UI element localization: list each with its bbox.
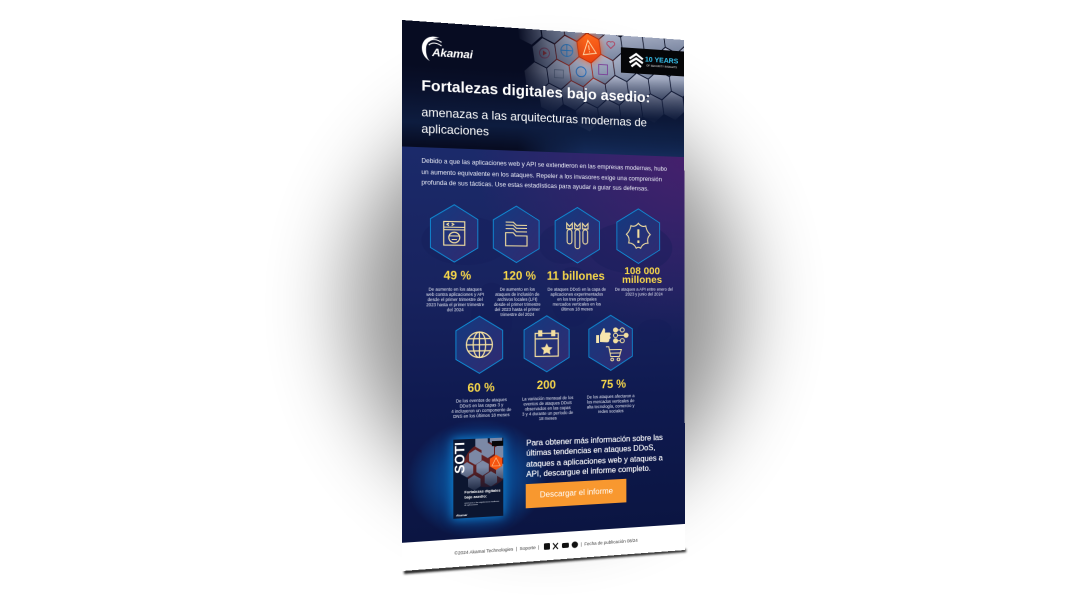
stat description 3: De ataques DDoS en la capa de bbox=[548, 286, 606, 291]
intro text bbox=[421, 158, 667, 193]
stat: 60 %: 60 % bbox=[467, 382, 495, 395]
icon: globe bbox=[456, 316, 503, 374]
panel: footer bbox=[402, 524, 685, 571]
download button bbox=[526, 479, 626, 508]
icon: alert badge bbox=[617, 208, 660, 264]
panel: header with hexagons bbox=[402, 20, 684, 157]
footer copyright: ©2024 Akamai Technologies | Soporte | bbox=[454, 545, 539, 556]
badge title: 10 YEARS bbox=[645, 55, 678, 66]
icon: calendar with star bbox=[524, 316, 569, 372]
stat description 5: DNS en los últimos 18 meses bbox=[453, 412, 510, 419]
cover subtitle: de aplicaciones bbox=[464, 504, 478, 507]
call to action text: Para obtener más información sobre las bbox=[526, 433, 663, 448]
stat description 5: De los eventos de ataques bbox=[456, 396, 507, 403]
icon: three bombs bbox=[555, 207, 599, 263]
cover title: Fortalezas digitales bbox=[464, 488, 501, 494]
stat description 2: del 2023 hasta el primer bbox=[495, 306, 540, 312]
stat description 4 bbox=[615, 286, 673, 297]
stat description 3: en los tres principales bbox=[557, 296, 597, 301]
stat: 200: 200 bbox=[537, 380, 556, 392]
stat description 1: 2023 hasta el primer trimestre bbox=[426, 301, 484, 307]
logo: Akamai bbox=[422, 36, 474, 62]
stat description 1: web contra aplicaciones y API bbox=[426, 291, 484, 296]
intro text: Debido a que las aplicaciones web y API se extendieron en las empresas modernas, hubo bbox=[421, 158, 667, 173]
icon: browser window with malicious face bbox=[430, 204, 478, 262]
intro text: profunda de sus tácticas. Use estas estadísticas para ayudar a guiar sus defensas. bbox=[421, 179, 649, 193]
cover subtitle: amenazas a las arquitecturas modernas bbox=[464, 501, 499, 505]
world map texture bbox=[602, 224, 672, 262]
stat description 7: De los ataques afectaron a bbox=[587, 393, 635, 399]
social icons bbox=[544, 541, 578, 550]
stat description 2: desde el primer trimestre bbox=[494, 301, 541, 307]
stat: 49 %: 49 % bbox=[444, 270, 471, 282]
stat description 3 bbox=[548, 286, 606, 311]
cover hexagons bbox=[460, 438, 504, 490]
stat description 2: De aumento en los bbox=[500, 286, 535, 291]
stat description 6: 18 meses bbox=[539, 415, 557, 421]
icon: thumb, nodes and shopping cart bbox=[589, 315, 632, 371]
subtitle: aplicaciones bbox=[421, 122, 489, 139]
call to action text: ataques a aplicaciones web y ataques a bbox=[526, 453, 663, 469]
book glow bbox=[406, 417, 548, 543]
icon: folders bbox=[493, 206, 539, 263]
stat: 11 billones: 11 billones bbox=[547, 270, 605, 282]
panel: body background bbox=[402, 146, 685, 543]
cover logo: Akamai bbox=[456, 512, 467, 517]
hexagon pattern bbox=[520, 28, 684, 131]
stat description 1: De aumento en los ataques bbox=[429, 286, 482, 291]
stat description 4: 2023 y junio del 2024 bbox=[625, 291, 663, 296]
stat icons: hexagons bbox=[430, 204, 660, 374]
intro text: un aumento equivalente en los ataques. Repeler a los invasores exige una comprensión bbox=[421, 168, 662, 183]
stat description 6 bbox=[522, 395, 574, 421]
stat description 4: De ataques a API entre enero del bbox=[615, 286, 673, 291]
icons on hexagons bbox=[529, 36, 615, 103]
stat: 120 %: 120 % bbox=[503, 270, 536, 282]
icon: orange warning hexagon bbox=[576, 32, 602, 64]
stat description 1: del 2024 bbox=[447, 307, 464, 312]
stat description 5: 4 incluyeron un componente de bbox=[451, 406, 511, 414]
hexagon fade overlay bbox=[402, 20, 684, 157]
stat description 6: 3 y 4 durante un período de bbox=[522, 409, 573, 416]
stat description 6: observados en las capas bbox=[525, 405, 571, 411]
cover subtitle bbox=[464, 500, 500, 507]
stat description 3: últimos 18 meses bbox=[561, 306, 593, 311]
stat description 6: La variación mensual de los bbox=[522, 395, 573, 401]
stat description 2: archivos locales (LFI) bbox=[497, 296, 537, 301]
title: Fortalezas digitales bajo asedio: bbox=[421, 78, 650, 106]
stat description 2: trimestre del 2024 bbox=[500, 311, 534, 317]
subtitle: amenazas a las arquitecturas modernas de bbox=[421, 106, 647, 129]
call to action text: API, descargue el informe completo. bbox=[526, 464, 651, 479]
stat description 2: ataques de inclusión de bbox=[495, 291, 539, 296]
stat description 3: aplicaciones experimentados bbox=[550, 291, 603, 296]
icon: Akamai swoosh bbox=[422, 36, 442, 61]
stat description 1 bbox=[426, 286, 484, 312]
cover title bbox=[464, 488, 501, 500]
report cover bbox=[453, 438, 503, 519]
badge: 10 years of security insights bbox=[621, 47, 684, 76]
download button: Descargar el informe bbox=[540, 486, 613, 499]
stat description 5 bbox=[451, 396, 512, 419]
stat: 75 %: 75 % bbox=[601, 378, 626, 391]
stat description 7: redes sociales bbox=[598, 408, 624, 414]
icon: chevrons bbox=[628, 52, 644, 68]
stat: 108 000 millones: millones bbox=[622, 275, 662, 286]
call to action text: últimas tendencias en ataques DDoS, bbox=[526, 443, 655, 458]
stat description 7: los mercados verticales de bbox=[587, 398, 634, 404]
cover title: bajo asedio: bbox=[464, 494, 487, 499]
badge subtitle: OF SECURITY INSIGHTS bbox=[646, 63, 677, 69]
stat: 108 000 millones: 108 000 bbox=[624, 266, 660, 277]
stat description 6: eventos de ataques DDoS bbox=[523, 400, 572, 406]
stat description 7 bbox=[586, 393, 635, 414]
call to action text bbox=[526, 433, 663, 479]
footer date: | Fecha de publicación 08/24 bbox=[581, 538, 638, 547]
stat description 3: mercados verticales en los bbox=[553, 301, 601, 306]
stat description 5: DDoS en las capas 3 y bbox=[460, 402, 503, 408]
stat description 1: desde el primer trimestre del bbox=[428, 296, 483, 302]
brand name: Akamai bbox=[432, 47, 473, 62]
stat: 108 000 millones bbox=[622, 266, 662, 286]
stat description 7: alta tecnología, comercio y bbox=[587, 403, 634, 409]
poster bbox=[402, 20, 685, 571]
stat description 2 bbox=[494, 286, 541, 317]
